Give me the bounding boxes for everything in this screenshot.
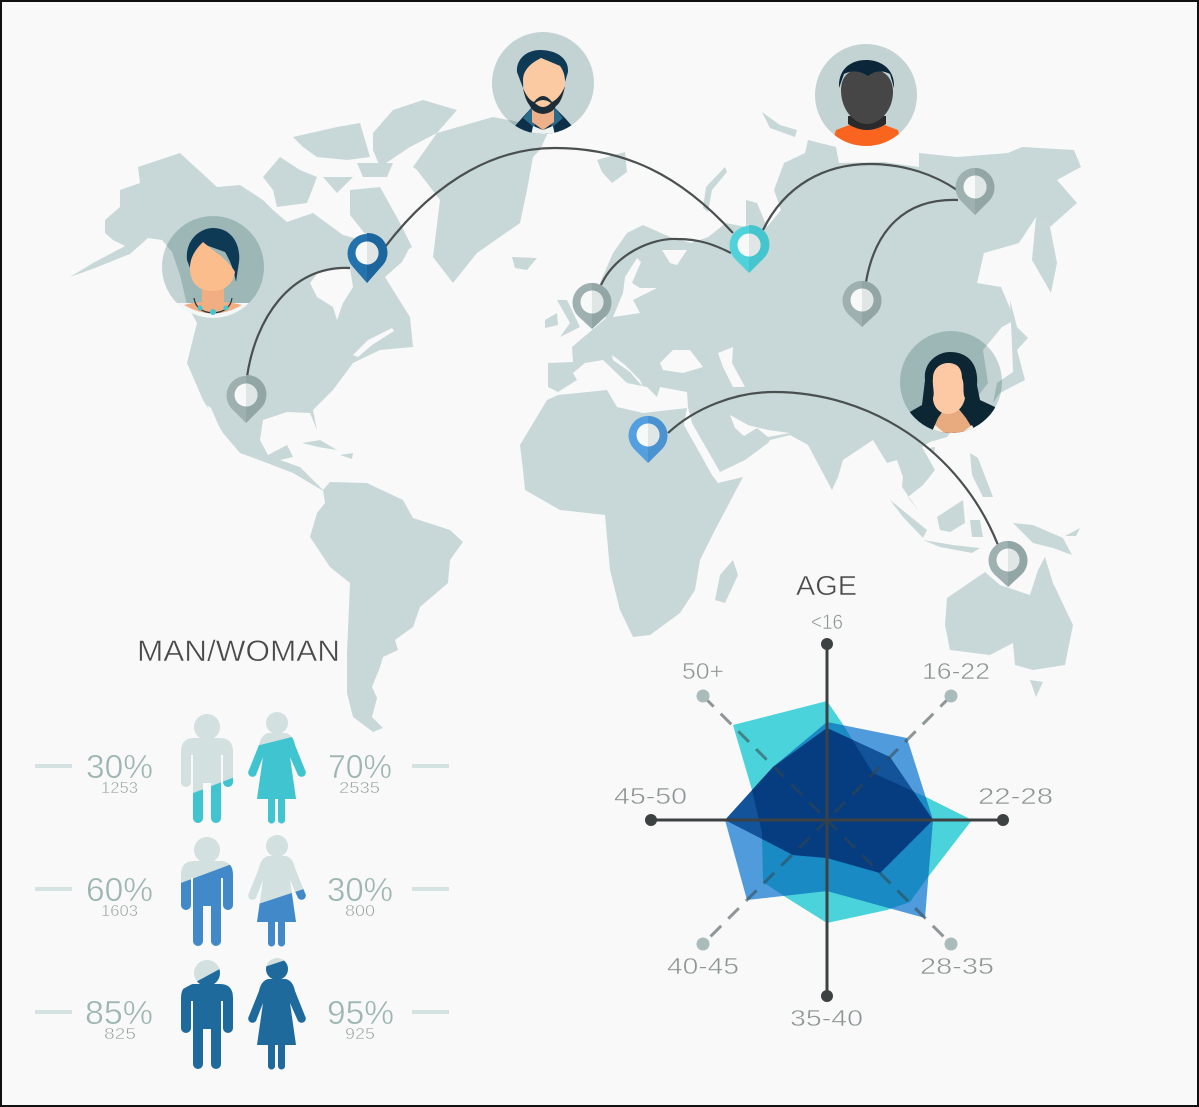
Greenland [413, 117, 550, 283]
main axes [645, 638, 1009, 1002]
pin: Europe [572, 283, 612, 329]
Southeast Asia islands [890, 447, 1080, 555]
pin: Mexico [227, 375, 266, 423]
row 3: dark blue figures 85% and 95% [35, 958, 449, 1070]
man 60%: 1603 [101, 903, 138, 920]
axis labels: 45-50 [614, 783, 687, 809]
woman 70%: 2535 [339, 780, 380, 797]
pin: Canada [348, 233, 387, 283]
man 30%: 30% [86, 748, 153, 785]
woman 30%: 800 [345, 903, 375, 920]
pin: Australia [989, 541, 1028, 587]
pin: Russia [730, 225, 769, 273]
Tasmania [1030, 680, 1043, 697]
series polygon: navy overlap [725, 728, 933, 873]
woman 30% [248, 835, 393, 946]
diagonal axis end dots [696, 690, 958, 950]
axis labels: <16 [811, 611, 843, 634]
man 85%: 825 [104, 1026, 136, 1043]
man 30% [86, 714, 233, 823]
Japan [993, 300, 1028, 403]
axis labels: 35-40 [790, 1005, 863, 1031]
North America [70, 153, 413, 492]
row 1: teal figures 30% and 70% [35, 712, 449, 824]
UK and Ireland [545, 300, 580, 337]
diagonal axes [703, 696, 951, 944]
Eurasia [548, 140, 1081, 513]
man 85% [85, 960, 233, 1069]
axis labels: 16-22 [922, 658, 990, 684]
Madagascar [715, 560, 738, 603]
series polygon: teal [733, 701, 972, 923]
man 60%: 60% [86, 871, 153, 908]
Baja gulf and Great Lakes [207, 328, 394, 433]
avatar: woman with short hair [162, 216, 264, 325]
man 60% [86, 837, 233, 946]
avatar: dark-skinned man in orange shirt [815, 44, 917, 150]
connection arcs [247, 148, 998, 545]
woman 70% [248, 712, 392, 824]
axis labels: 40-45 [667, 953, 739, 979]
avatar: man with goatee [492, 32, 594, 140]
dashes row 2 [35, 887, 449, 891]
pin: East Siberia [956, 168, 994, 215]
radar chart [614, 611, 1053, 1031]
avatar: woman with long dark hair [900, 331, 1002, 440]
axis labels: 28-35 [920, 953, 994, 979]
dashes row 3 [35, 1010, 449, 1014]
Caribbean islands [302, 440, 353, 459]
man 85%: 85% [85, 994, 153, 1031]
heading: age: AGE [796, 570, 857, 601]
axis labels: 50+ [682, 658, 724, 684]
heading: man/woman: MAN/WOMAN [137, 635, 340, 668]
woman 95% [248, 958, 394, 1070]
woman 95%: 925 [345, 1026, 375, 1043]
Africa [520, 390, 743, 637]
South America [310, 482, 463, 732]
pin: Africa [628, 416, 668, 463]
man 30%: 1253 [101, 780, 138, 797]
Australia [945, 557, 1073, 670]
Hudson Bay [310, 268, 353, 320]
Svalbard and Arctic islands [597, 112, 797, 212]
series polygon: blue [725, 722, 933, 918]
Iceland [512, 257, 537, 270]
woman 70%: 70% [328, 748, 392, 785]
dashes row 1 [35, 764, 449, 768]
Canadian arctic islands [263, 100, 457, 258]
row 2: blue figures 60% and 30% [35, 835, 449, 946]
seas [612, 250, 790, 437]
woman 95%: 95% [327, 994, 394, 1031]
woman 30%: 30% [327, 871, 393, 908]
axis labels: 22-28 [978, 783, 1053, 809]
axis labels [614, 611, 1053, 1031]
Kamchatka [1032, 217, 1057, 293]
world map [70, 100, 1081, 732]
pin: China [843, 281, 882, 327]
